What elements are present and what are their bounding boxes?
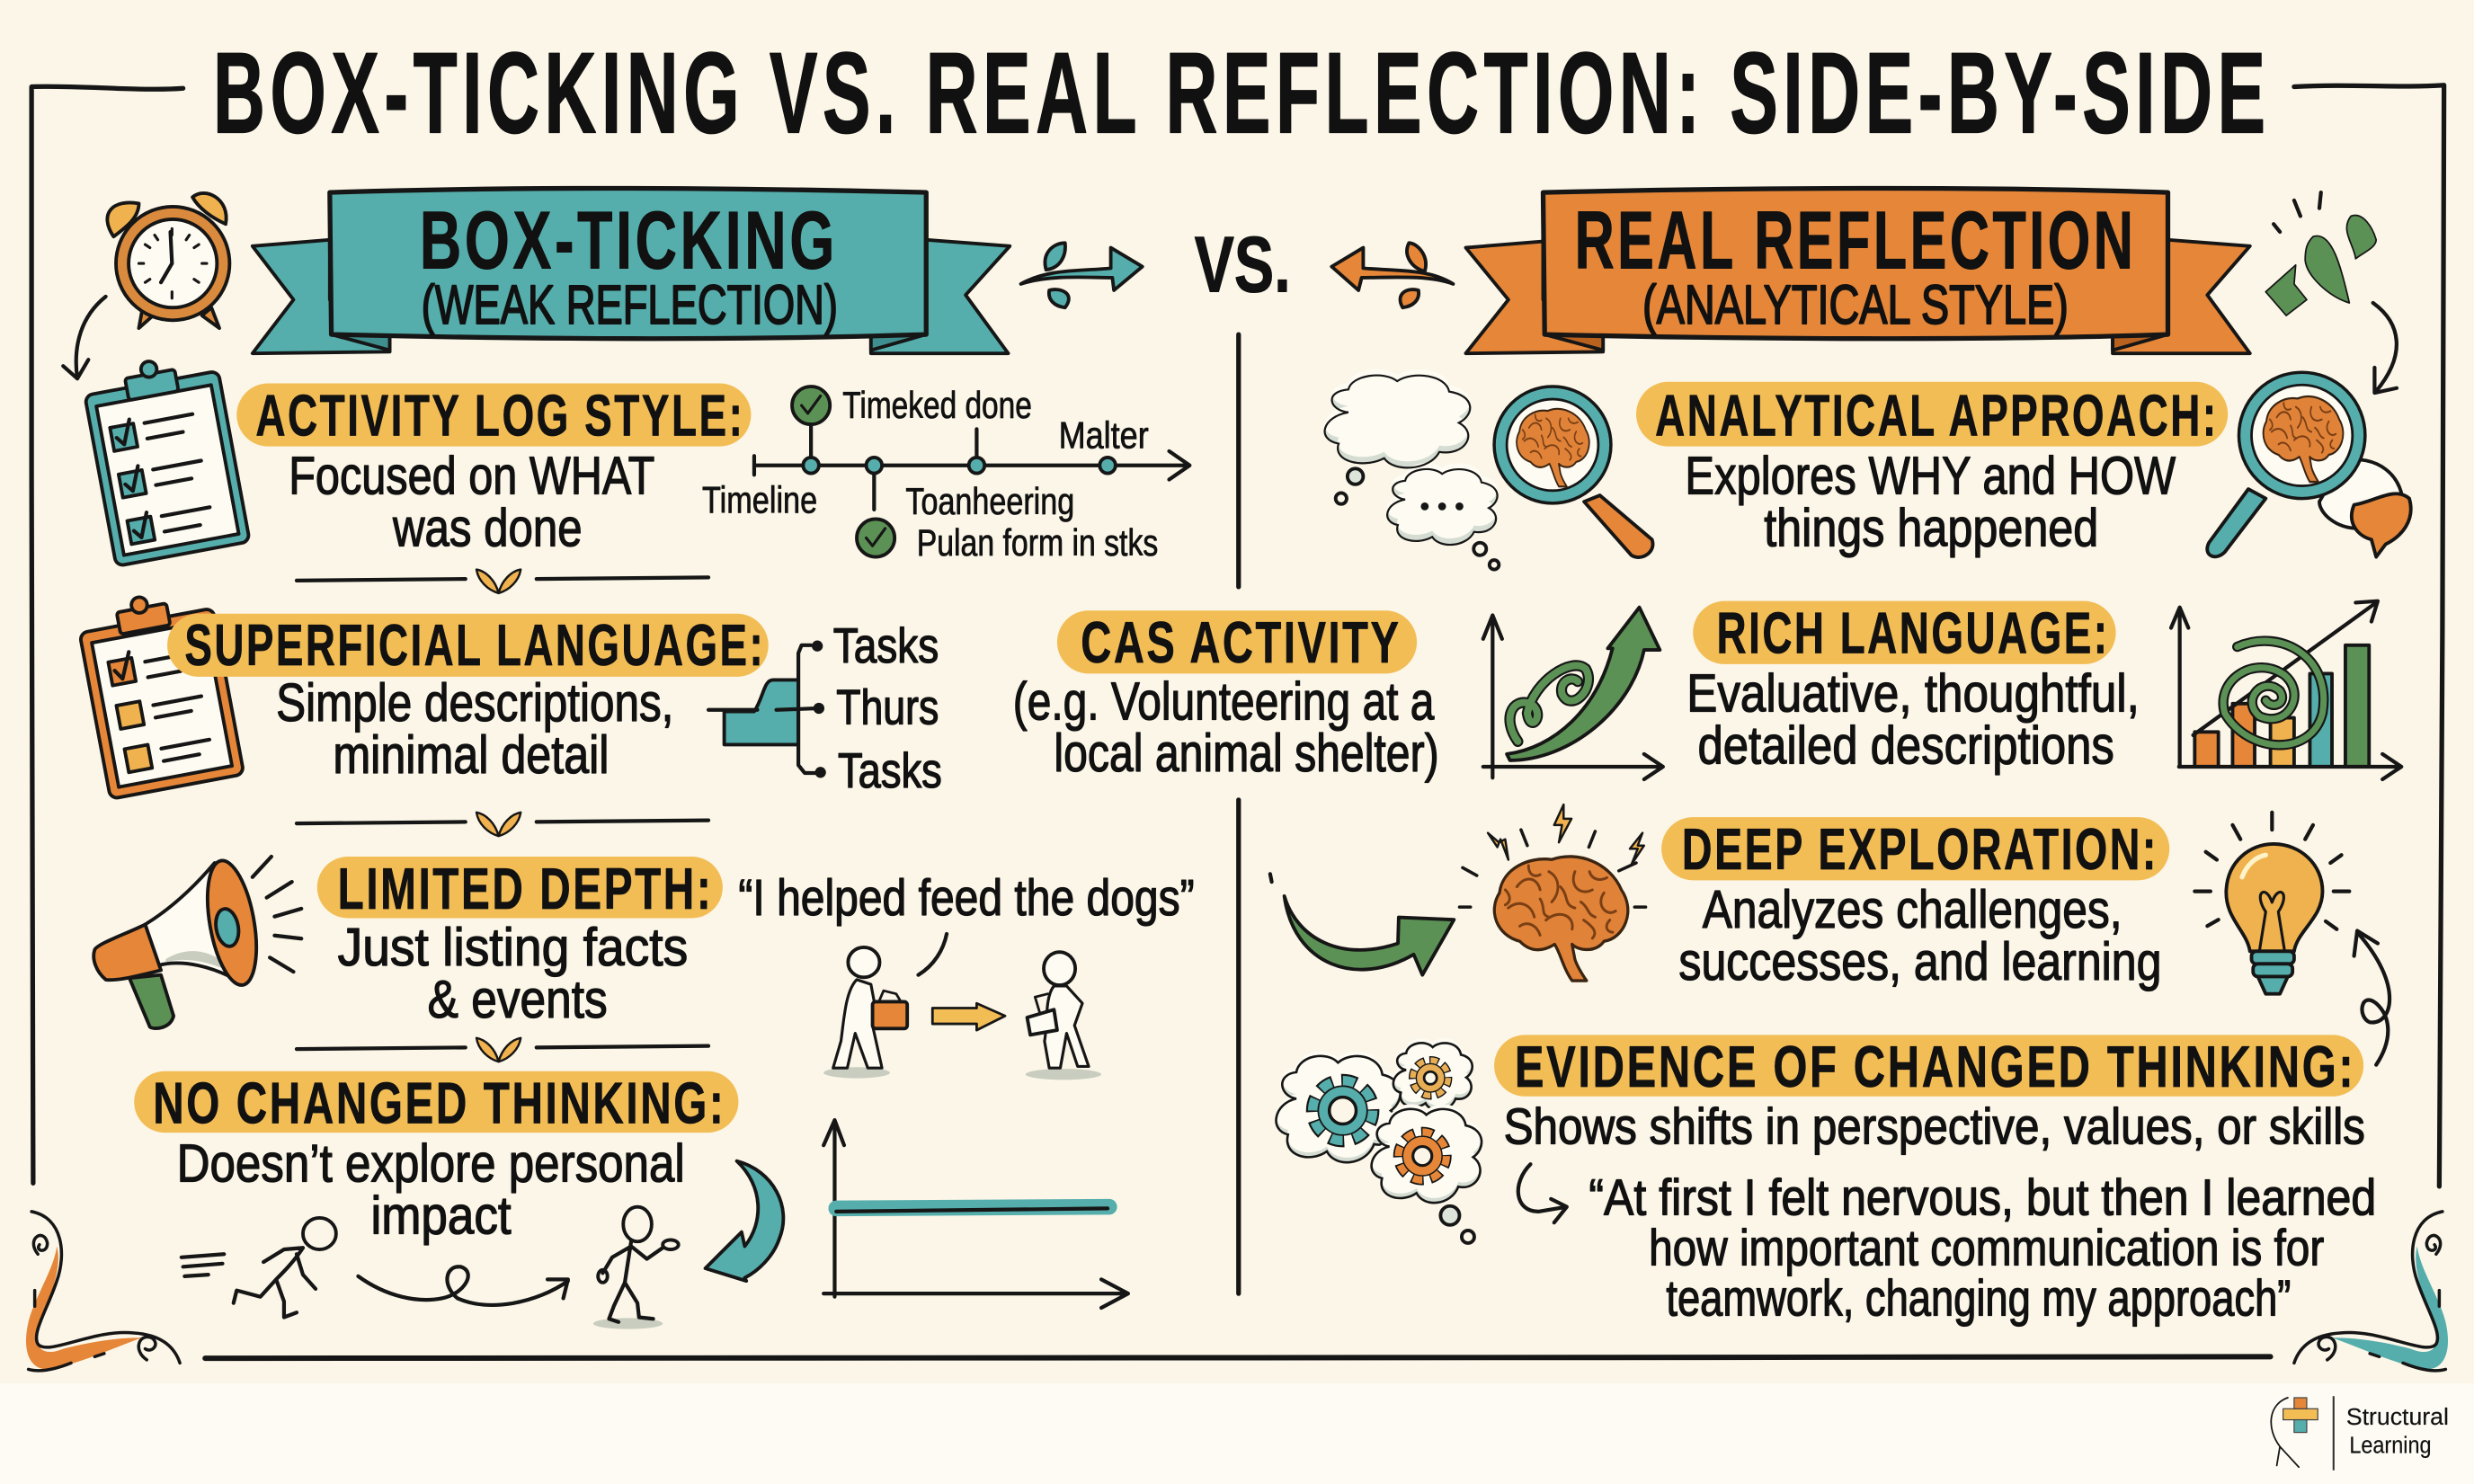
section heading: DEEP EXPLORATION: bbox=[1682, 816, 2158, 882]
icon: thought clouds bbox=[1325, 369, 1499, 570]
banner subheading: (ANALYTICAL STYLE) bbox=[1642, 274, 2069, 336]
logo: structural learning bbox=[2271, 1396, 2449, 1471]
growth arrow chart bbox=[1483, 608, 1663, 779]
illustration: standing figure bbox=[593, 1207, 679, 1329]
arrow: green swoosh bbox=[1270, 874, 1454, 975]
quote: changed thinking bbox=[1589, 1169, 2376, 1327]
banner heading: REAL REFLECTION bbox=[1575, 194, 2136, 286]
icon: teal clipboard bbox=[81, 349, 250, 566]
center divider lower bbox=[1237, 800, 1240, 1293]
description: Explores WHY and HOW bbox=[1685, 445, 2176, 505]
icon: light bulb bbox=[2194, 813, 2349, 994]
panel: center cas activity bbox=[1013, 609, 1439, 783]
description: Simple descriptions, bbox=[276, 672, 673, 733]
label pill bbox=[236, 383, 751, 447]
label pill bbox=[1494, 1035, 2363, 1097]
description line 2: detailed descriptions bbox=[1697, 715, 2114, 775]
quote line 2: how important communication is for bbox=[1649, 1220, 2324, 1276]
quote: changed thinking: “At first I felt nervous, but then I learned bbox=[1589, 1169, 2376, 1225]
flat line chart bbox=[823, 1120, 1128, 1308]
footer band bbox=[0, 1383, 2474, 1484]
icon: gear thought clouds bbox=[1277, 1038, 1482, 1243]
panel: box-ticking column bbox=[63, 193, 1195, 1329]
banner heading: BOX-TICKING bbox=[420, 194, 838, 286]
timeline label: Malter bbox=[1059, 413, 1149, 456]
description: Doesn’t explore personal bbox=[177, 1133, 685, 1194]
vs label: VS. bbox=[1195, 221, 1291, 309]
icon: brain with sparks bbox=[1459, 804, 1646, 981]
label pill bbox=[167, 614, 769, 677]
section: no changed thinking bbox=[134, 1071, 738, 1245]
icon: alarm clock bbox=[107, 193, 229, 328]
arrow: to quote bbox=[1518, 1164, 1567, 1222]
right banner: real reflection bbox=[1465, 188, 2250, 353]
section: analytical approach bbox=[1636, 382, 2228, 557]
icon: green leaves bbox=[2265, 192, 2376, 315]
center divider upper bbox=[1237, 334, 1240, 587]
description line 2: minimal detail bbox=[333, 724, 609, 785]
description: Evaluative, thoughtful, bbox=[1686, 663, 2140, 724]
description line 2: & events bbox=[428, 969, 608, 1029]
branch diagram bbox=[708, 618, 942, 798]
illustration: helper handing food bbox=[823, 934, 1101, 1080]
quote line 3: teamwork, changing my approach” bbox=[1666, 1270, 2291, 1327]
corner ornament: bottom left bbox=[26, 1212, 180, 1371]
arrow: loop bbox=[358, 1266, 568, 1305]
arrow: teal curved bbox=[706, 1161, 783, 1281]
label pill bbox=[317, 857, 723, 918]
branch label: Tasks bbox=[838, 743, 942, 798]
arrow: teal to vs bbox=[1021, 243, 1143, 307]
section heading: NO CHANGED THINKING: bbox=[153, 1071, 725, 1136]
timeline label: Timeline bbox=[702, 478, 817, 520]
example text: (e.g. Volunteering at a bbox=[1013, 671, 1435, 731]
timeline label: Timeked done bbox=[842, 384, 1032, 426]
divider with leaf bbox=[297, 570, 708, 593]
icon: orange clipboard bbox=[75, 584, 244, 799]
icon: magnifier with brain left bbox=[1494, 387, 1653, 557]
label pill bbox=[1636, 382, 2228, 447]
logo word: Structural bbox=[2346, 1403, 2449, 1430]
description line 2: successes, and learning bbox=[1678, 931, 2161, 991]
description line 2: things happened bbox=[1764, 497, 2098, 557]
divider with leaf bbox=[297, 1038, 708, 1062]
description: Analyzes challenges, bbox=[1703, 879, 2122, 939]
panel: real reflection column bbox=[1270, 192, 2411, 1327]
section heading: LIMITED DEPTH: bbox=[338, 856, 713, 921]
section: limited depth bbox=[317, 856, 723, 1029]
label pill bbox=[1057, 610, 1417, 673]
branch label: Tasks bbox=[833, 618, 939, 673]
label pill bbox=[134, 1071, 738, 1133]
section heading: CAS ACTIVITY bbox=[1081, 609, 1402, 675]
description: Shows shifts in perspective, values, or skills bbox=[1504, 1097, 2365, 1154]
section heading: SUPERFICIAL LANGUAGE: bbox=[184, 612, 765, 678]
section heading: ANALYTICAL APPROACH: bbox=[1655, 382, 2219, 448]
bar chart with spiral bbox=[2171, 601, 2401, 779]
timeline label: Toanheering bbox=[905, 480, 1074, 522]
illustration: running figure bbox=[182, 1218, 336, 1317]
arrow: orange to vs bbox=[1331, 243, 1453, 307]
divider with leaf bbox=[297, 813, 708, 836]
timeline label: Pulan form in stks bbox=[917, 521, 1158, 564]
section heading: RICH LANGUAGE: bbox=[1717, 600, 2110, 666]
arrow: clock to clipboard bbox=[63, 297, 106, 378]
timeline diagram bbox=[702, 384, 1189, 564]
example text line 2: local animal shelter) bbox=[1054, 723, 1439, 783]
banner subheading: (WEAK REFLECTION) bbox=[422, 274, 838, 336]
description: Just listing facts bbox=[338, 917, 688, 977]
description line 2: was done bbox=[392, 497, 583, 557]
label pill bbox=[1693, 601, 2116, 664]
arrow: curved to magnifier bbox=[2373, 303, 2397, 393]
arrow: curly to bulb bbox=[2354, 930, 2389, 1065]
corner ornament: bottom right bbox=[2294, 1212, 2448, 1371]
section heading: ACTIVITY LOG STYLE: bbox=[255, 382, 744, 448]
description line 2: impact bbox=[370, 1185, 512, 1245]
label pill bbox=[1661, 817, 2169, 880]
section: evidence of changed thinking bbox=[1494, 1034, 2365, 1154]
section: superficial language bbox=[167, 612, 769, 785]
logo word: Learning bbox=[2349, 1431, 2432, 1458]
icon: megaphone bbox=[93, 857, 301, 1028]
section: activity log style bbox=[236, 382, 751, 557]
section: deep exploration bbox=[1661, 816, 2169, 991]
branch label: Thurs bbox=[836, 680, 939, 735]
left banner: box-ticking bbox=[253, 188, 1010, 353]
quote: feed the dogs: “I helped feed the dogs” bbox=[738, 869, 1195, 926]
section: rich language bbox=[1686, 600, 2140, 775]
description: Focused on WHAT bbox=[289, 445, 654, 505]
icon: magnifier with brain right bbox=[2207, 372, 2411, 557]
